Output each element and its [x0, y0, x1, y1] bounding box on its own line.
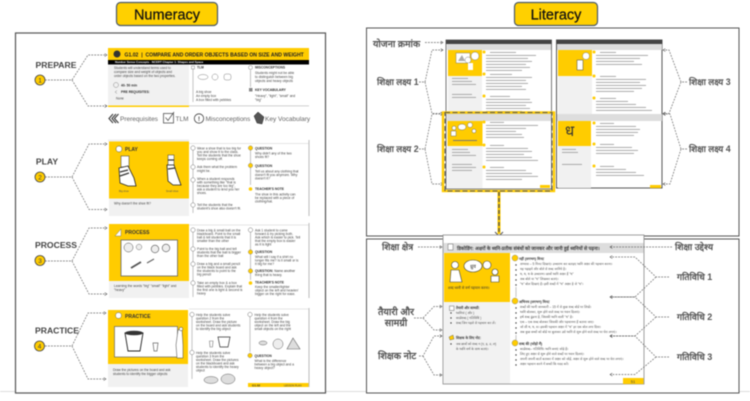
- lesson card: process: smaller than the other: [197, 239, 230, 243]
- lesson card: practice: QUESTION: [254, 354, 272, 358]
- lesson card: practice: between a big object and a: [254, 362, 294, 366]
- illustration: teacher with students: [450, 260, 499, 282]
- lesson card: play: clothing/hat.: [255, 200, 273, 204]
- lesson card: process: Point to the big ball and tell: [197, 247, 237, 251]
- activity 2: हर्ष शब्द ढूंढना है, जिसकी ध्वनि वाली "ध" है।: [520, 315, 573, 319]
- label: preparation and materials: सामग्री: [384, 317, 408, 329]
- label: learning objective 3: शिक्षा लक्ष्य 3: [688, 76, 731, 87]
- icon: small shoe: [167, 155, 181, 185]
- lesson card: process: bigger on the right for ease.: [255, 292, 295, 296]
- lesson card: practice: object: [196, 368, 205, 372]
- lesson card: play: PLAY: [125, 147, 139, 153]
- section label: play: [35, 156, 58, 182]
- label: learning objective: शिक्षा उद्देश्य: [674, 241, 714, 252]
- lesson card: practice: students to identify the bigger objects: [113, 372, 168, 376]
- label: learning objective 3: [663, 50, 731, 114]
- lesson card: play: student's shoe also doesn't fit.: [197, 206, 241, 210]
- lesson card: play: shoes.: [197, 191, 207, 195]
- connector: practice: [45, 313, 106, 379]
- lesson card: prepare: MISCONCEPTIONS: [255, 66, 286, 70]
- label: plan number: योजना क्रमांक: [372, 38, 421, 49]
- lesson card: practice: G1.02: [252, 384, 261, 388]
- lesson card: practice: question 4 from the: [254, 316, 283, 320]
- section label: practice: [34, 326, 79, 351]
- heading: Literacy: [514, 2, 598, 26]
- activity 2: अब कुछ बच्चों को बोर्ड पर बुलाकर उसे ध्वनि से शुरू होने वाले शब्द पर घेरा लगाएं।: [520, 330, 617, 334]
- heading: Numeracy: Numeracy: [134, 8, 201, 24]
- lesson card: practice: worksheet. Draw the pictures: [196, 358, 239, 362]
- lesson card: process: heavy: [197, 292, 206, 296]
- lesson card: play: keeps coming off.: [197, 157, 223, 161]
- lesson card: practice: worksheet. Draw the big: [254, 320, 290, 324]
- lesson card: practice: on the blackboard and ask: [196, 362, 235, 366]
- materials and teacher note: शिक्षक के लिए नोट:: [455, 335, 481, 340]
- lesson card: play: [108, 140, 310, 216]
- legend: icons: !: [198, 117, 200, 123]
- lesson card: play: QUESTION: [255, 164, 273, 168]
- lesson card: practice: heavy object?: [254, 366, 275, 370]
- lesson card: process: PROCESS: [125, 230, 150, 236]
- activity 2: एक – एक शब्द बोलकर जिसकी और पहचानना हैं बताया जाए।: [520, 320, 594, 324]
- section label: play: 2: [38, 174, 42, 182]
- label: learning objective 2: [376, 114, 443, 184]
- section label: process: [35, 240, 77, 266]
- connector: prepare: [45, 55, 107, 106]
- materials and teacher note: [449, 305, 496, 351]
- label: preparation and materials: [377, 306, 442, 330]
- materials and teacher note: शब्द जिन पहले से पहचान कर लें।: [456, 321, 496, 325]
- materials and teacher note: जब छात्रों को शब्द न (ए, इ, उ, ल): [456, 342, 496, 346]
- lesson card: process: [109, 223, 310, 298]
- label: activity 3: गतिविधि 3: [676, 351, 712, 362]
- lesson card: play: you and show it to the class.: [197, 150, 239, 154]
- activity 2: जो सी थ, ध, स। इसकी पहचान अक्षर में "ध" हर एक बोल लगा दिया।: [520, 325, 601, 329]
- whiteboard with bucket and glass: [114, 326, 183, 358]
- lesson card: play: might be.: [197, 169, 211, 173]
- section label: prepare: [35, 60, 77, 85]
- lesson card: play: Why doesn't the shoe fit?: [114, 202, 151, 206]
- section label: practice: 4: [38, 344, 42, 350]
- section label: prepare: 1: [38, 78, 42, 84]
- label: teacher note: [377, 336, 442, 375]
- lesson card: play: doesn't it?: [255, 176, 270, 180]
- lesson card: play: Ask them what the problem: [197, 165, 237, 169]
- lesson card: prepare: to distinguish between big: [255, 75, 293, 79]
- lesson card: prepare: objects and heavy objects: [255, 79, 293, 83]
- panel: literacy detail: [366, 235, 739, 393]
- activity 2: शब्दों की ध्वनी जानकारी – 15 में से कुछ शब्द बोर्ड पर लिखें।: [520, 305, 591, 309]
- lesson card: prepare: TLM: [197, 66, 204, 70]
- lesson card: play: doesn't fit you anymore. Why: [255, 173, 298, 177]
- lesson card: practice: on the board and ask students: [196, 324, 241, 328]
- lesson card: practice: LESSON PLAN: [284, 384, 302, 388]
- lesson page: right: [556, 40, 662, 188]
- label: learning objective 4: [663, 114, 731, 184]
- label: learning area: [381, 241, 442, 252]
- activity 1: अभ्यास – 5 मिनट दिखाएं। उच्चारण कर बताइए ध्वनि अक्षर की पहचान करना।: [520, 262, 612, 266]
- lesson card: practice: object on the left and the: [254, 324, 291, 328]
- connector: process: [45, 228, 107, 294]
- lesson card: process: forward & try picking both.: [255, 232, 293, 236]
- objective text: डिकोडिंग: अक्षरों के ध्वनि-प्रतीक संबंधों को जानकर और जानी हुई ध्वनियों से पढ़ना।: [456, 245, 600, 252]
- lesson card: process: the first one is light & second is: [197, 288, 243, 292]
- label: learning area: शिक्षा क्षेत्र: [381, 241, 414, 252]
- objective text: [448, 244, 600, 252]
- lesson card: process: Take an empty box & a box: [197, 281, 237, 285]
- lesson card: process: as it is light: [255, 242, 271, 246]
- lesson card: process: students that the ball is bigger: [197, 250, 242, 254]
- lesson card: prepare: PRE REQUISITES:: [121, 90, 150, 94]
- lesson card: process: QUESTION: [255, 250, 273, 254]
- activity 2: [512, 298, 617, 341]
- lesson card: process: the students to point to the: [197, 269, 236, 273]
- lesson card: process: filled with pebbles. Explain that: [197, 284, 242, 288]
- lesson card: process: ball & tell students that it is: [197, 236, 236, 240]
- lesson card: play: When a student responds: [197, 177, 235, 181]
- heading: Literacy: Literacy: [531, 8, 582, 24]
- materials and teacher note: कार्डशब्द ( गतिविधि ): [456, 316, 481, 320]
- activity 1: यह पढ़ाइये और बोले से शब्द जानिये है।: [520, 267, 566, 271]
- lesson card: process: big pencil: [197, 272, 211, 276]
- whiteboard illustration: [121, 240, 178, 276]
- label: learning objective 4: शिक्षा लक्ष्य 4: [688, 143, 731, 154]
- lesson card: process: Draw a big and a small pencil: [197, 262, 240, 266]
- lesson card: prepare: [108, 48, 309, 107]
- lesson card: practice: What is the difference: [254, 359, 286, 363]
- lesson card: process: Draw a big & small ball on the: [197, 228, 241, 232]
- label: activity 1: [610, 257, 712, 297]
- lesson card: prepare: Number Sense Concepts - NCERT Chapter 1: Shapes and Space: [115, 60, 204, 64]
- lesson card: play: Big shoe: [119, 190, 129, 193]
- legend: icons: Key Vocabulary: [265, 116, 311, 123]
- lesson card: practice: students to identify the heavy: [196, 365, 239, 369]
- label: teacher note: शिक्षक नोट: [377, 350, 417, 362]
- panel: numeracy: [16, 33, 326, 393]
- lesson card: play: ask a student to lend you her: [197, 188, 240, 192]
- lesson card: process: Keep the smaller/lighter: [255, 285, 291, 289]
- label: learning objective 2: शिक्षा लक्ष्य 2: [376, 143, 419, 154]
- lesson card: prepare: KEY VOCABULARY: [255, 88, 287, 92]
- lesson card: prepare: Students will understand terms used to: [114, 66, 171, 70]
- activity 1: [512, 255, 612, 297]
- lesson card: process: Learning the words "big" "small" "light" and: [114, 284, 177, 288]
- lesson card: play: with something like "that is: [197, 180, 236, 184]
- lesson card: process: Ask 1 student to come: [255, 228, 288, 232]
- panel: literacy overview: [366, 28, 739, 236]
- label: preparation and materials: तैयारी और: [377, 306, 415, 318]
- lesson card: practice: Draw the pictures on the board and ask: [113, 368, 171, 372]
- lesson card: process: that the empty box is easier: [255, 239, 296, 243]
- lesson card: practice: Help the students solve: [196, 351, 230, 355]
- section label: play: PLAY: [36, 156, 58, 166]
- label: activity 2: गतिविधि 2: [676, 311, 712, 322]
- lesson card: prepare: Students might not be able: [255, 71, 294, 75]
- icon: big shoe: [119, 156, 136, 186]
- lesson card: practice: small objects on the right: [254, 327, 291, 331]
- activity 3: अपनी अपनी बातों बताकर में अक्षर को जोड़ें, अक्षर से शुरू होने वाले शब्द पर घेरा लगाएं।: [520, 357, 623, 361]
- legend: icons: Misconceptions: [206, 116, 251, 123]
- lesson card: practice: worksheet. Draw the picture: [196, 320, 237, 324]
- lesson detail page: शब्द ध्वनी से वर्ण पहचान करना।: [448, 285, 490, 290]
- materials and teacher note: के ध्वनि वर्ण के साथ बताएं।: [456, 347, 488, 351]
- section label: process: PROCESS: [35, 240, 77, 250]
- lesson card: practice: question 2 from the: [196, 316, 224, 320]
- activity 3: अक्षर पहचान करने में बच्चों कि मदद करें।: [520, 362, 569, 366]
- activity 1: नहीं (लगभग) मिनट: [518, 256, 544, 261]
- lesson card: process: longer fits me? Is it small or is: [255, 258, 299, 262]
- label: plan number: [372, 38, 443, 49]
- lesson card: play: Tell the students that the: [197, 203, 233, 207]
- lesson card: play: Why didn't any of the two: [255, 152, 292, 156]
- lesson card: practice: [108, 308, 310, 388]
- lesson card: play: The shoe in this activity can: [255, 192, 296, 196]
- label: activity 2: [610, 297, 712, 336]
- lesson card: play: QUESTION: [255, 146, 273, 150]
- lesson card: process: "heavy": [114, 288, 126, 292]
- lesson card: process: What will I say if a shirt no: [255, 255, 293, 259]
- section label: process: 3: [38, 258, 42, 265]
- lesson card: practice: PRACTICE: [125, 314, 151, 320]
- arrow: zoom to detail: [495, 192, 503, 236]
- activity 2: ध्वनि बोलकर, शुरू होने वाले शब्द पर ध्यान दिलाएं।: [520, 310, 580, 314]
- lesson card: practice: Help the students solve: [254, 313, 289, 317]
- faint baseline: [0, 390, 750, 392]
- lesson card: process: thing that is heavy.: [255, 273, 282, 277]
- lesson card: play: Wear a shoe that is too big for: [197, 146, 242, 150]
- label: learning objective 1: [376, 50, 443, 114]
- lesson card: play: shoes fit?: [255, 155, 269, 159]
- lesson card: prepare: order objects based on the two properties.: [114, 74, 176, 78]
- lesson card: process: than the other ball: [197, 254, 224, 258]
- lesson detail page: [443, 235, 644, 384]
- lesson card: prepare: None: [116, 96, 124, 100]
- lesson card: play: be replaced with a piece of: [255, 196, 294, 200]
- activity 1: "ध" बोल दिखाएं हैं। इसी शब्दों में "ध" अक्षर है जे "ध"।: [520, 282, 583, 286]
- second lesson, highlighted: [447, 114, 551, 188]
- lesson card: prepare: A big shoe: [196, 90, 212, 94]
- lesson card: prepare: G1.02 | COMPARE AND ORDER OBJECTS BASED ON SIZE AND WEIGHT: [124, 52, 305, 58]
- lesson card: practice: Help the students solve: [196, 313, 230, 317]
- lesson card: practice: to identify the big object: [196, 327, 231, 331]
- legend: icons: Prerequisites: [120, 116, 159, 123]
- heading: Numeracy: [116, 2, 218, 26]
- section label: prepare: PREPARE: [36, 60, 77, 70]
- activity 2: अभिनय (लगभग) मिनट: [519, 299, 550, 304]
- lesson card: play: Small shoe: [166, 190, 179, 193]
- lesson card: play: TEACHER'S NOTE: [255, 187, 285, 191]
- lesson card: play: Tell us about any clothing that: [255, 170, 299, 174]
- lesson card: process: Ask which is easier to pick. Tell: [255, 236, 300, 240]
- lesson card: process: blackboard. Point to the small: [197, 232, 241, 236]
- lesson card: process: on the black board and ask: [197, 266, 237, 270]
- label: learning objective: [610, 241, 714, 252]
- lesson card: prepare: "Heavy", "light", "small" and: [255, 94, 295, 98]
- activity 3: शब्द की (जोड़ो मैं): [519, 341, 543, 346]
- highlight frame around lesson 2: [443, 112, 554, 191]
- lesson card: prepare: 40- 50 min: [121, 83, 137, 87]
- materials and teacher note: ध्वनियां ( और ): [456, 311, 474, 315]
- lesson card: play: because they are too big",: [197, 184, 235, 188]
- lesson card: process: TEACHER'S NOTE: [255, 280, 285, 284]
- lesson page: left: [446, 40, 552, 189]
- lesson card: practice: question 3 from the: [196, 354, 224, 358]
- illustration: teacher with students: ध्रुव: [470, 264, 476, 270]
- lesson card: prepare: An empty box: [196, 94, 217, 98]
- legend: icons: TLM: [176, 116, 188, 123]
- materials and teacher note: तैयारी और सामग्री:: [455, 305, 480, 310]
- section label: practice: PRACTICE: [35, 326, 79, 336]
- lesson card: process: QUESTION: Name another: [255, 269, 296, 273]
- activity 1: अब बोले या "ध" लिखकर बताएं।: [520, 277, 558, 281]
- lesson card: play: Tell the students that the shoe: [197, 154, 241, 158]
- connector: play: [45, 144, 107, 210]
- lesson card: prepare: compare size and weight of objects and: [114, 70, 172, 74]
- lesson page: right: ध: [565, 123, 575, 140]
- lesson card: prepare: A box filled with pebbles: [196, 98, 232, 102]
- activity 1: ध, ध, ध के उच्चारण। छात्रों ध्वनि अक्षर हैं "ध": [520, 272, 574, 276]
- lesson card: process: object on the left and heavier/: [255, 288, 298, 292]
- activity 3: कार्डशब्द– गतिविधि। ध्वनि बनाएं जोड़े हैं।: [520, 347, 568, 351]
- label: activity 3: [610, 336, 712, 374]
- lesson card: process: it big for me?: [255, 262, 274, 266]
- activity 3: लिए हुए अक्षर से शुरू होने वाले शब्दों पर ध्यान दिलाएं।: [520, 352, 584, 357]
- lesson detail page: 51: [631, 379, 636, 384]
- activity 3: [512, 340, 623, 366]
- lesson card: prepare: "big": [255, 98, 263, 102]
- label: activity 1: गतिविधि 1: [676, 271, 712, 282]
- legend: icons: [109, 112, 311, 124]
- label: learning objective 1: शिक्षा लक्ष्य 1: [376, 76, 419, 87]
